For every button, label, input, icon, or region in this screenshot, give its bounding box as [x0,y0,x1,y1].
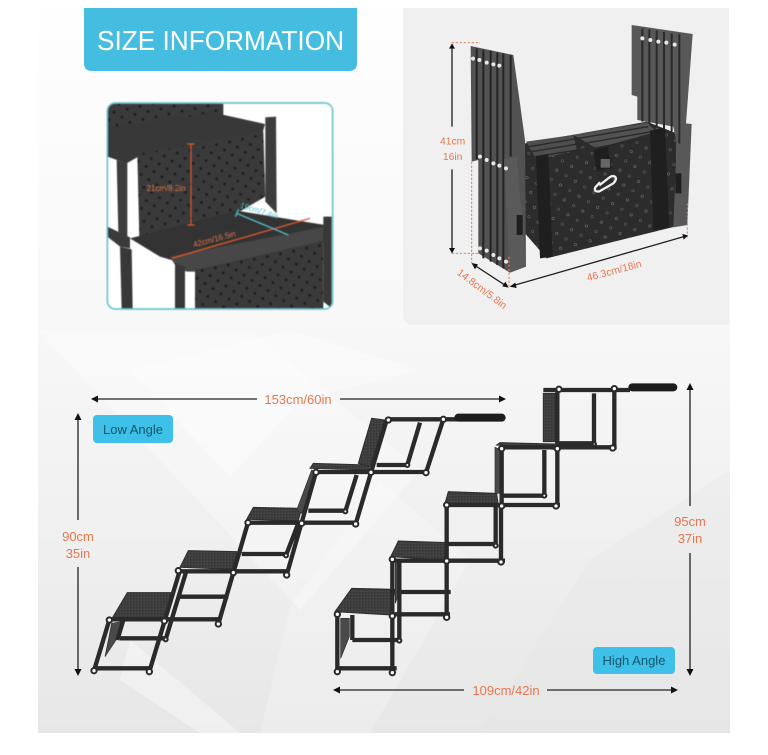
treads [335,393,555,658]
treads [105,418,385,657]
dimension: 109cm/42in: 109cm/42in [472,683,540,698]
height arrow 41cm [440,43,465,253]
high angle stairs [335,386,673,675]
grip handle [632,375,673,399]
badge: low angle [93,415,173,443]
dimension: 95cm/37in [674,383,706,676]
badge: high angle: High Angle [603,653,665,668]
low angle stairs [91,417,502,674]
height arrow 41cm: 41cm [440,137,465,148]
width arrow 46.3cm [510,234,688,288]
joints [335,386,617,675]
title banner [84,8,357,71]
grip handle [458,406,502,430]
title: SIZE INFORMATION [97,25,344,56]
dimension: 90cm/35in: 90cm [62,529,94,544]
frame bars [94,419,460,672]
frame bars [337,389,630,673]
right slats [632,25,693,227]
depth arrow 14.8cm: 14.8cm/5.8in [455,267,509,312]
width arrow 46.3cm: 46.3cm/18in [586,259,643,284]
dimension: 109cm/42in [333,683,678,698]
body with perforated panel [525,122,677,258]
panel: folded size background [403,8,729,325]
joints [91,417,446,674]
badge: high angle [593,647,675,674]
height arrow 41cm: 16in [443,152,463,163]
dimension: 90cm/35in [62,413,94,676]
depth dimension 19cm [235,201,288,235]
width dimension 42cm: 42cm/16.5in [192,229,237,249]
dimension: 153cm/60in [91,392,506,407]
panel: step detail inset [107,103,333,309]
width dimension 42cm [172,218,310,258]
height dimension 21cm [146,144,195,225]
dimension guide lines [452,43,687,287]
left slats [471,46,526,273]
height dimension 21cm: 21cm/8.2in [146,184,186,193]
dimension: 95cm/37in: 95cm [674,514,706,529]
dimension: 90cm/35in: 35in [66,546,90,561]
badge: low angle: Low Angle [103,422,163,437]
carabiner clip [595,176,616,191]
depth dimension 19cm: 19cm/7.4in [239,201,279,221]
dimension: 95cm/37in: 37in [678,531,702,546]
folded stairs product [440,25,693,312]
dimension: 153cm/60in: 153cm/60in [264,392,332,407]
